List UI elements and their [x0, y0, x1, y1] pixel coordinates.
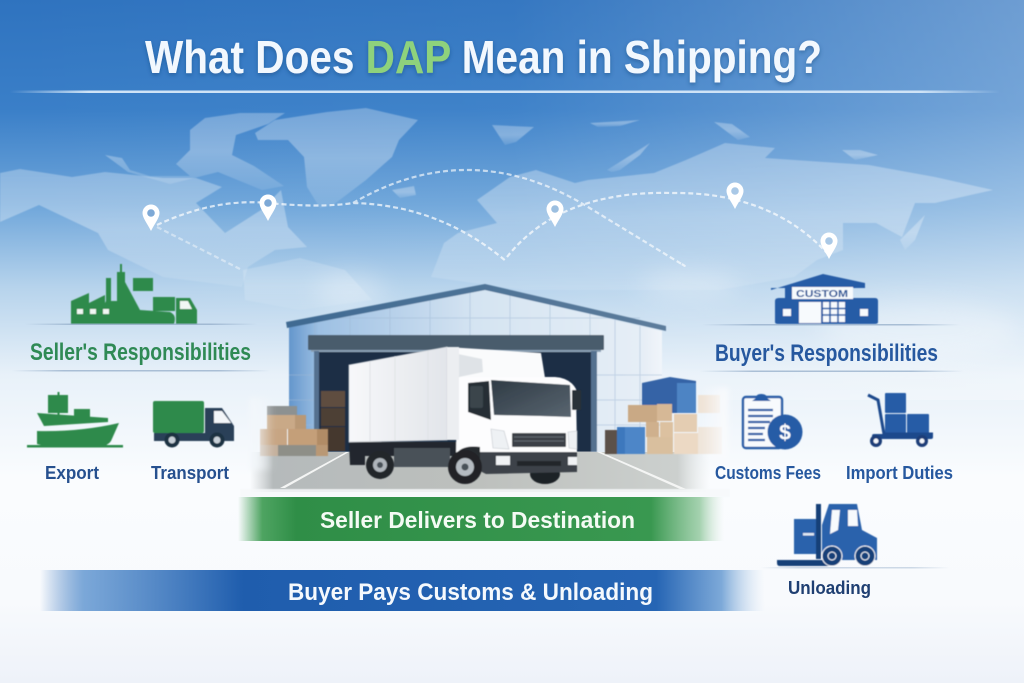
- boxes left fade: [250, 398, 274, 470]
- transport label: Transport: [151, 463, 229, 483]
- buyer rule under forklift: [760, 567, 950, 568]
- unloading label: Unloading: [788, 578, 871, 598]
- icon: ship: [27, 392, 123, 448]
- title rule: [10, 90, 1000, 93]
- mirror: [572, 390, 581, 410]
- warehouse: [286, 284, 666, 456]
- boxes left: [260, 406, 328, 456]
- icon: custom building: CUSTOM: [796, 288, 848, 300]
- icon: factory and truck: [71, 264, 197, 324]
- rear wheel: [366, 451, 394, 479]
- box roof and deflector: [447, 347, 545, 378]
- ground: [250, 452, 710, 492]
- warehouse roof: [286, 284, 666, 331]
- chassis: [349, 442, 480, 465]
- title: What Does DAP Mean in Shipping?: [145, 31, 822, 83]
- buyer heading: Buyer's Responsibilities: [715, 340, 938, 367]
- windshield: [491, 380, 571, 417]
- blue banner: [40, 570, 765, 611]
- blue banner: Buyer Pays Customs & Unloading: [288, 579, 653, 606]
- seller heading: Seller's Responsibilities: [30, 339, 251, 366]
- clouds: [315, 271, 1020, 360]
- door header: [308, 335, 604, 350]
- seller rule bottom: [12, 370, 270, 372]
- headlights: [491, 429, 509, 449]
- icon: custom building: [771, 274, 878, 324]
- ground fade: [240, 489, 730, 497]
- front wheel: [448, 450, 482, 484]
- side window: [468, 381, 491, 420]
- boxes right fade: [702, 388, 728, 460]
- icon: clipboard with dollar: [743, 394, 802, 450]
- delivery truck: [349, 347, 581, 484]
- door opening: [318, 349, 592, 452]
- world map: [0, 108, 993, 310]
- grille: [512, 433, 566, 447]
- green banner: Seller Delivers to Destination: [320, 507, 635, 533]
- location pins: [142, 182, 838, 259]
- icon: truck: [153, 401, 234, 448]
- import duties label: Import Duties: [846, 463, 953, 483]
- icon: forklift: [777, 504, 877, 566]
- buyer rule bottom: [700, 370, 964, 372]
- icon: hand cart: [868, 393, 933, 447]
- route arcs: [157, 170, 827, 270]
- cab: [456, 377, 577, 468]
- warehouse wall: [289, 290, 662, 456]
- panel: buyer: [700, 274, 964, 598]
- icon: clipboard with dollar: $: [779, 422, 791, 444]
- cargo box: [349, 347, 447, 442]
- export label: Export: [45, 463, 99, 483]
- seller rule top: [25, 324, 257, 325]
- far wheel: [530, 464, 560, 484]
- boxes right: [605, 377, 722, 454]
- panel: seller: [12, 264, 270, 483]
- boxes inside door: [321, 391, 345, 451]
- front wheel arch: [452, 446, 480, 470]
- customs fees label: Customs Fees: [715, 463, 821, 483]
- bumper: [478, 452, 577, 474]
- buyer rule top: [702, 324, 960, 326]
- green banner: [238, 497, 724, 541]
